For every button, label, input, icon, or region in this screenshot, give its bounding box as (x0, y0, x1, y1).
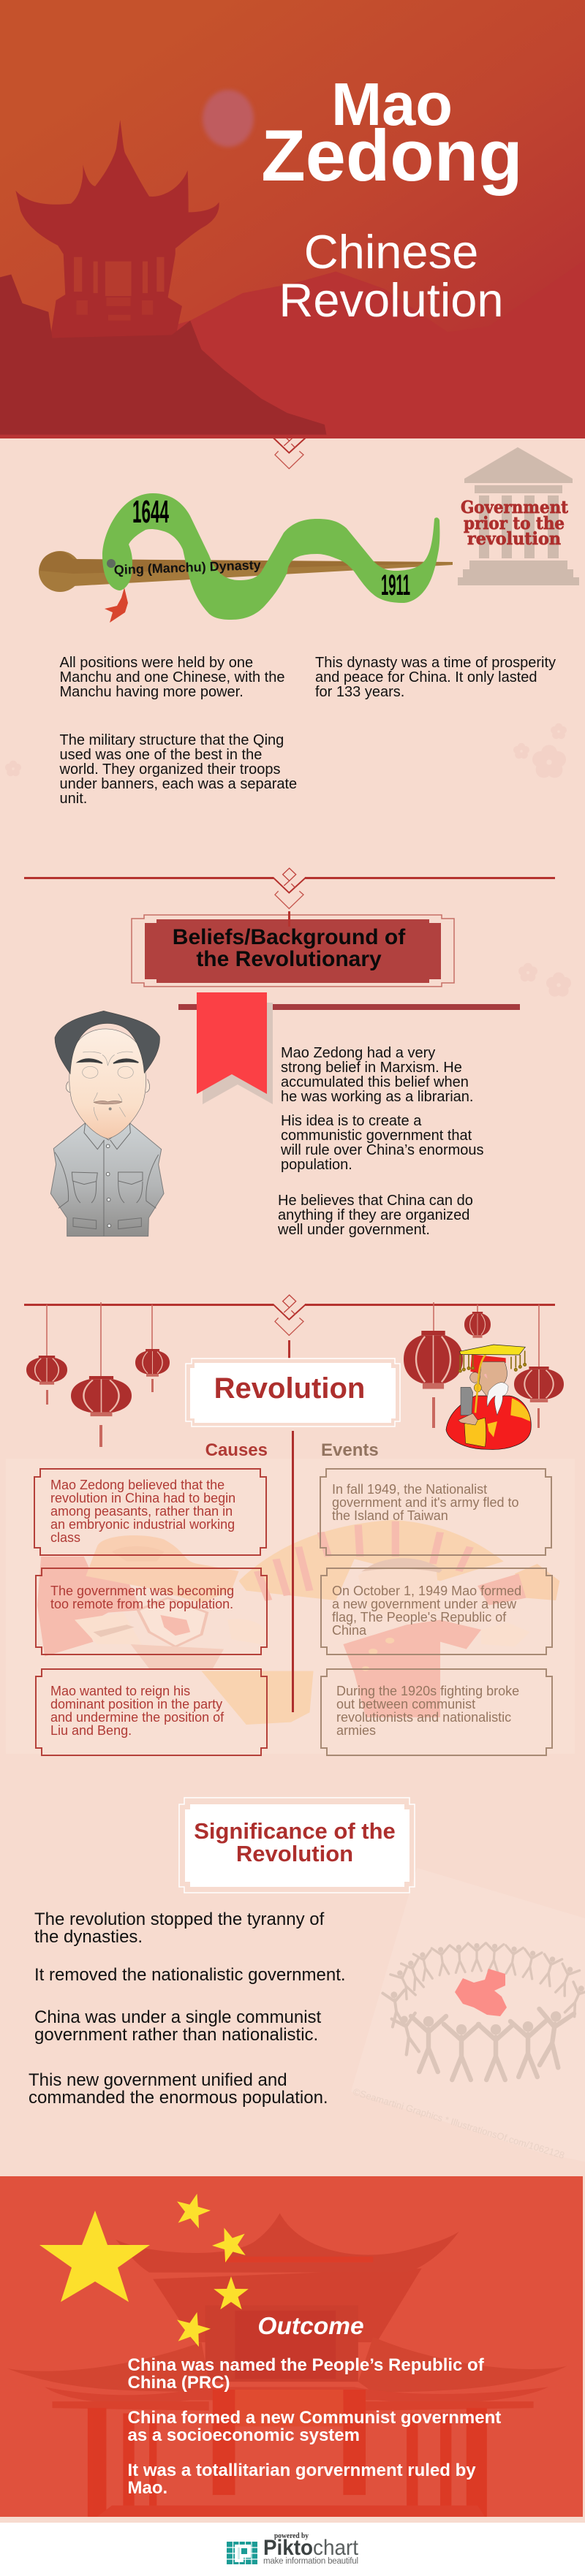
panel: causes box 2: too remote from the population. (50, 1597, 233, 1611)
staff (39, 551, 453, 592)
panel: events box 1: government and it's army fled to (332, 1495, 519, 1510)
central timeline line (292, 1431, 294, 1712)
title: Mao Zedong: Mao (331, 70, 453, 138)
label: Qing (Manchu) Dynasty: Qing (Manchu) Dynasty (113, 558, 261, 577)
divider: revolution (24, 1295, 555, 1359)
title: Mao Zedong: Zedong (261, 115, 523, 196)
panel: events box 1: In fall 1949, the Nationalist (332, 1482, 487, 1497)
panel: causes box 1: an embryonic industrial working (50, 1517, 235, 1532)
decorative blossoms (5, 723, 571, 997)
Piktochart wordmark (263, 2536, 359, 2566)
panel: events box 3 (321, 1669, 552, 1755)
heading: Outcome: Outcome (257, 2313, 364, 2340)
flag star large (39, 2211, 150, 2302)
Piktochart wordmark: make information beautiful (263, 2557, 358, 2566)
text: positions: Manchu having more power. (60, 684, 244, 700)
Piktochart wordmark: chart (313, 2536, 359, 2560)
watermark credit: ©Seamartini Graphics * IllustrationsOf.com/1062128 (352, 2086, 566, 2161)
heading: Revolution (186, 1359, 400, 1426)
icon: ribbon (197, 992, 273, 1104)
text: totalitarian: Mao. (127, 2478, 167, 2498)
map of China (455, 1969, 507, 2016)
panel: causes box 1 (34, 1469, 266, 1555)
text: military: used was one of the best in the (60, 747, 262, 763)
heading banner: Beliefs/Background (132, 911, 454, 987)
text: belief in Marxism: strong belief in Marxism. He (281, 1060, 462, 1076)
panel: events box 3: During the 1920s fighting broke (336, 1684, 519, 1698)
text: military: world. They organized their troops (58, 761, 281, 778)
text: Communist government: China formed a new Communist government (127, 2408, 501, 2428)
text: tyranny: The revolution stopped the tyranny of (34, 1910, 325, 1929)
label: 1644: 1644 (132, 494, 169, 530)
panel: causes box 1: Mao Zedong believed that the (50, 1478, 224, 1492)
heading: Significance of the Revolution: Revolution (236, 1841, 353, 1866)
icon: government temple (458, 447, 579, 585)
text: belief in Marxism: Mao Zedong had a very (281, 1045, 435, 1061)
text: Communist government: as a socioeconomic system (127, 2425, 360, 2445)
heading: Government prior to the revolution: revolution (467, 529, 561, 549)
panel: causes box 3: and undermine the position of (50, 1710, 224, 1725)
text: China can do anything: He believes that China can do (278, 1193, 473, 1209)
footer (0, 2523, 585, 2576)
text: PRC: China was named the People’s Republic of (127, 2355, 485, 2375)
text: removed nationalist government: It removed the nationalistic government. (34, 1965, 346, 1985)
watermark: people circle around China (351, 1868, 585, 2162)
panel: outcome (0, 2176, 585, 2523)
heading banner: Beliefs/Background: Beliefs/Background of (173, 925, 406, 949)
panel: causes box 3: dominant position in the party (50, 1697, 222, 1711)
heading: Government prior to the revolution: Government (461, 498, 568, 517)
text: China can do anything: anything if they are organized (278, 1207, 469, 1223)
text: unified population: commanded the enormous population. (29, 2088, 328, 2108)
heading: Government prior to the revolution: prior to the (464, 514, 565, 533)
text: military: unit. (60, 791, 87, 807)
text: unified population: This new government unified and (29, 2070, 287, 2090)
text: China can do anything: well under government. (277, 1222, 430, 1238)
flag star 3 (214, 2276, 249, 2309)
text: 1911 (381, 569, 410, 601)
heading: Causes: Causes (205, 1440, 268, 1460)
panel: events box 1: the Island of Taiwan (332, 1508, 448, 1523)
panel: events box 3: out between communist (336, 1697, 475, 1711)
panel: events box 1 (320, 1469, 551, 1555)
back row of people (382, 1943, 585, 2056)
text: communist idea: will rule over China’s enormous (280, 1142, 484, 1158)
subtitle: Chinese Revolution (279, 225, 504, 327)
text: prosperity: and peace for China. It only lasted (315, 669, 537, 685)
Piktochart logo mark (227, 2542, 257, 2564)
timeline: snake wrapped around staff (39, 493, 453, 623)
subtitle: Chinese Revolution: Revolution (279, 273, 504, 327)
text: single communist government: government rather than nationalistic. (34, 2025, 318, 2045)
text: communist idea: population. (281, 1157, 352, 1173)
snake eye (107, 559, 116, 568)
panel: causes box 3 (36, 1669, 267, 1755)
text: communist idea: His idea is to create a (281, 1113, 422, 1129)
panel: events box 3: armies (336, 1723, 376, 1738)
panel: causes box 1: class (50, 1530, 80, 1545)
ornament under hero (273, 428, 306, 468)
hero landscape: mountains, pagoda and hill (0, 120, 585, 438)
text: totalitarian: It was a totallitarian gorvernment ruled by (127, 2461, 476, 2480)
panel: events box 2: China (332, 1623, 367, 1638)
sun (203, 90, 254, 147)
panel: causes box 1: among peasants, rather than in (50, 1504, 233, 1519)
text: military: The military structure that the Qing (60, 732, 284, 748)
text: belief in Marxism: accumulated this belief when (281, 1074, 469, 1090)
text: military: under banners, each was a separate (60, 776, 297, 792)
Piktochart wordmark: Pikto (263, 2536, 313, 2560)
snake tongue (105, 588, 128, 623)
panel: causes box 1: revolution in China had to begin (50, 1491, 235, 1505)
heading: Events: Events (321, 1440, 379, 1460)
heading: Government prior to the revolution (461, 498, 568, 549)
text: PRC: China (PRC) (127, 2373, 230, 2393)
panel: causes box 3: Mao wanted to reign his (50, 1684, 190, 1698)
heading: Significance of the Revolution (179, 1798, 415, 1893)
subtitle: Chinese Revolution: Chinese (304, 225, 478, 278)
flag star 2 (208, 2222, 252, 2265)
panel: hero header (0, 0, 585, 438)
lanterns (26, 1302, 564, 1447)
text: positions: All positions were held by one (60, 655, 253, 671)
snake body (102, 493, 439, 620)
front row of people (411, 2009, 574, 2080)
panel: events box 2 (321, 1568, 552, 1654)
text: tyranny: the dynasties. (34, 1927, 143, 1947)
panel: events box 2: a new government under a new (332, 1597, 517, 1611)
heading: Revolution: Revolution (214, 1372, 365, 1405)
text: belief in Marxism: he was working as a librarian. (281, 1089, 473, 1105)
panel: causes box 2 (36, 1568, 267, 1654)
illustration: emperor clipart (446, 1345, 531, 1450)
flag star 1 (172, 2189, 214, 2230)
panel: causes box 2: The government was becoming (50, 1584, 234, 1598)
title: Mao Zedong (261, 70, 523, 196)
panel: causes box 3: Liu and Beng. (50, 1723, 132, 1738)
watermark: dragon dance illustration (6, 1459, 575, 1754)
flag star 4 (172, 2308, 214, 2349)
heading banner: Beliefs/Background: the Revolutionary (196, 947, 382, 971)
powered by: powered by (274, 2531, 309, 2540)
illustration: Mao caricature (50, 1011, 164, 1236)
text: positions: Manchu and one Chinese, with the (60, 669, 284, 685)
text: communist idea: communistic government that (281, 1128, 472, 1144)
text: prosperity: This dynasty was a time of prosperity (315, 655, 556, 671)
text: single communist government: China was under a single communist (34, 2007, 322, 2027)
panel: events box 3: revolutionists and nationalistic (336, 1710, 511, 1725)
rule beside ribbon (178, 1004, 520, 1010)
heading: Significance of the Revolution: Significance of the (194, 1818, 396, 1844)
panel: events box 2: flag, The People's Republic of (332, 1610, 507, 1625)
divider: beliefs (24, 868, 555, 908)
text: prosperity: for 133 years. (315, 684, 404, 700)
pagoda silhouette (7, 2213, 567, 2517)
panel: events box 2: On October 1, 1949 Mao formed (332, 1584, 521, 1598)
